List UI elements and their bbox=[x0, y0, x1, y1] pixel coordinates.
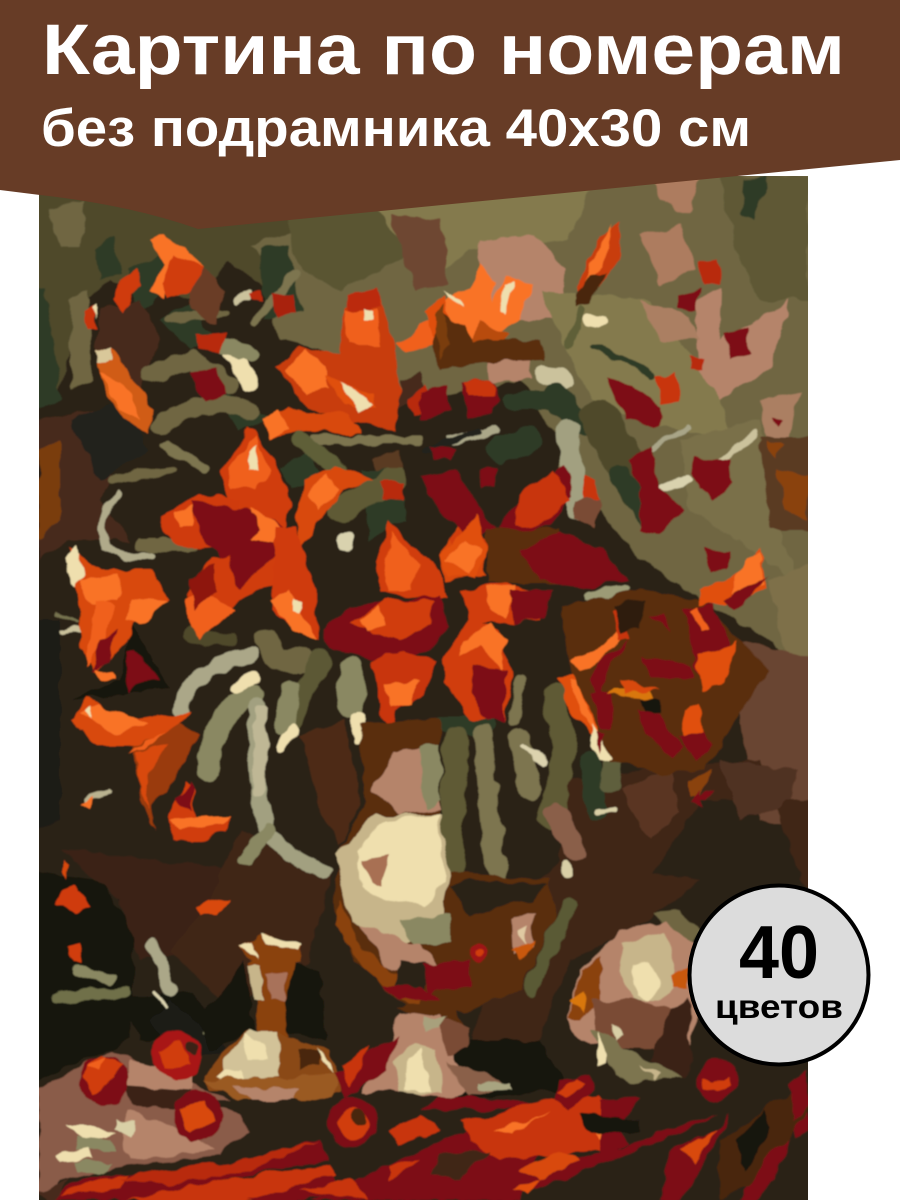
cloth left bbox=[39, 1050, 250, 1190]
painting background bbox=[20, 160, 830, 1200]
table and drapery bbox=[39, 1035, 808, 1200]
drape bbox=[57, 1076, 694, 1184]
banner: brown header bbox=[0, 0, 900, 229]
central lily bbox=[322, 520, 512, 735]
top lily petals bbox=[276, 290, 400, 430]
red berries bbox=[607, 258, 782, 630]
left lilies bbox=[55, 545, 230, 962]
upper right lily bbox=[440, 262, 530, 345]
painting: still life with lilies bbox=[20, 160, 830, 1200]
right lilies bbox=[557, 545, 770, 808]
upper olive wall bbox=[118, 176, 808, 652]
apples bbox=[80, 1030, 738, 1146]
buds and top lily bbox=[84, 222, 620, 438]
subheading: size: без подрамника 40х30 см bbox=[41, 99, 751, 158]
small jug bbox=[200, 936, 340, 1110]
badge: 40 colours: 40 bbox=[739, 910, 819, 994]
vase foot bbox=[362, 1012, 475, 1103]
round fruit bbox=[567, 912, 700, 1095]
dark red lily bbox=[420, 378, 628, 625]
vase leaves bbox=[445, 715, 485, 735]
dark green shadows among stems bbox=[95, 236, 164, 308]
main vase bbox=[300, 718, 555, 1112]
lower left dark bbox=[39, 872, 136, 1080]
lower right bbox=[470, 860, 700, 1040]
heading: title: Картина по номерам bbox=[42, 11, 845, 90]
leaves and stems bbox=[55, 275, 755, 1030]
badge: 40 colours bbox=[690, 886, 868, 1064]
drooping leaves bbox=[180, 655, 250, 708]
big left lily bbox=[160, 427, 405, 640]
badge: 40 colours: цветов bbox=[715, 988, 843, 1025]
